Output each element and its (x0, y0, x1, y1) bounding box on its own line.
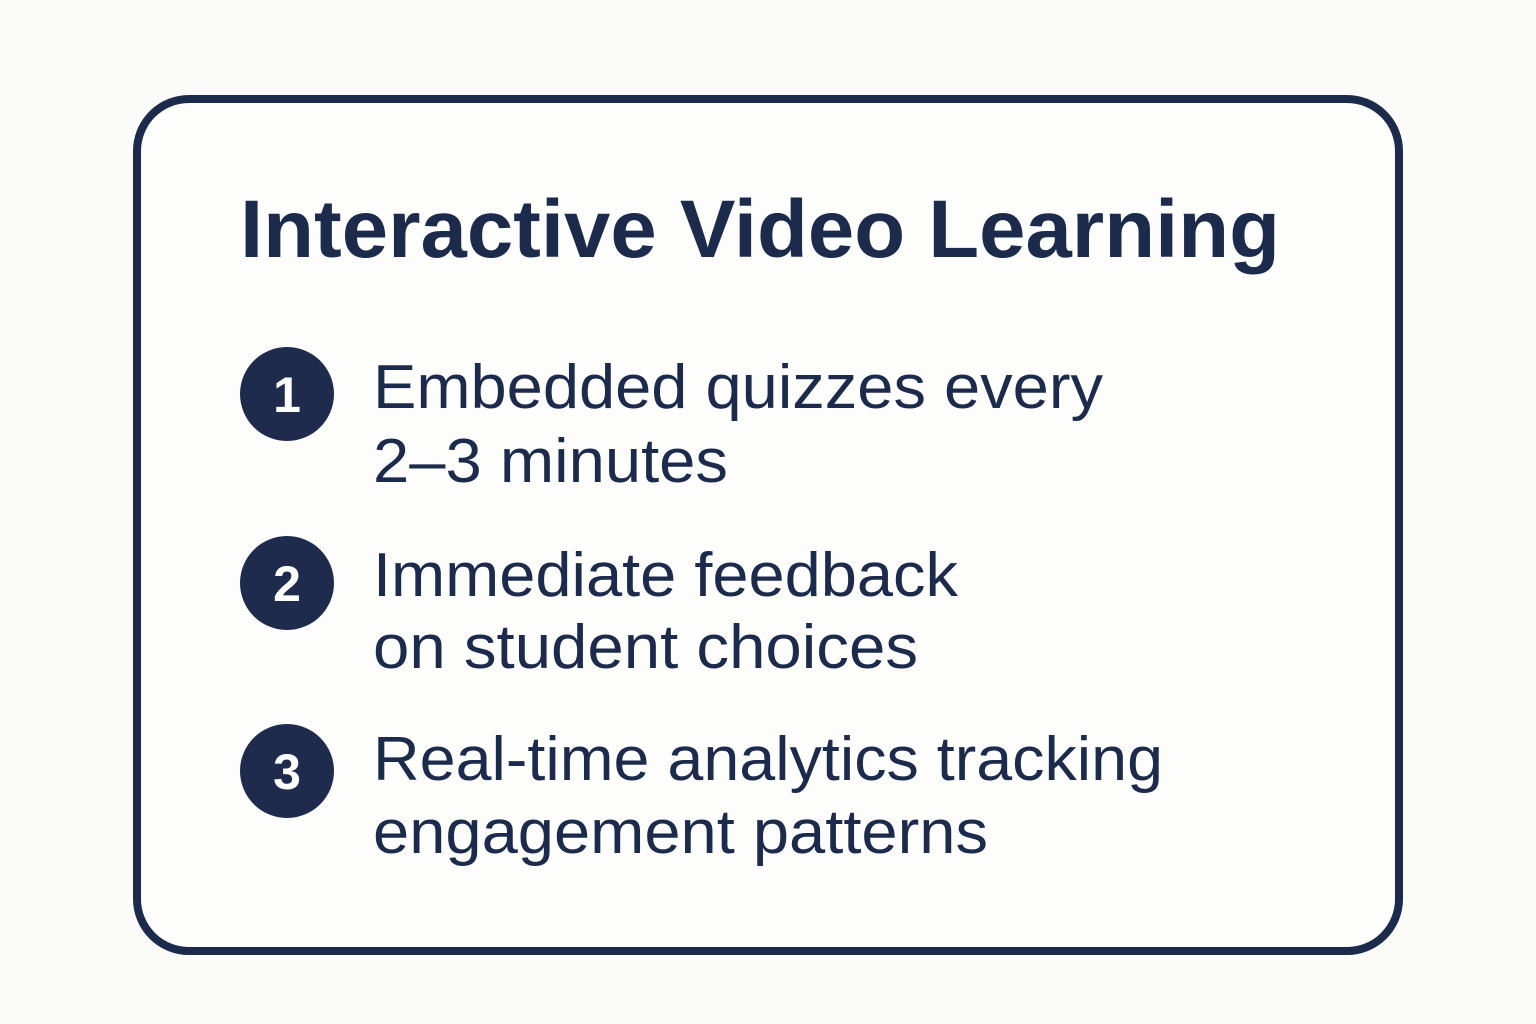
item 3 (240, 724, 1163, 867)
text: item 2: on student choices (373, 613, 918, 682)
panel: card (137, 99, 1399, 951)
item 1 (240, 347, 1103, 496)
icon: number 2 circle: 2 (273, 556, 301, 612)
text: item 3 (373, 725, 1163, 867)
item 2 (240, 536, 959, 682)
text: item 2 (373, 541, 959, 682)
text: item 3: engagement patterns (373, 798, 988, 867)
icon: number 1 circle: 1 (273, 367, 301, 423)
icon: number 3 circle (240, 724, 334, 818)
text: item 1 (373, 353, 1103, 496)
text: item 1: 2–3 minutes (373, 427, 728, 496)
text: item 3: Real-time analytics tracking (373, 725, 1163, 794)
text: item 1: Embedded quizzes every (373, 353, 1103, 422)
icon: number 1 circle (240, 347, 334, 441)
icon: number 2 circle (240, 536, 334, 630)
icon: number 3 circle: 3 (273, 744, 301, 800)
title: Interactive Video Learning (240, 184, 1280, 275)
text: item 2: Immediate feedback (373, 541, 959, 610)
